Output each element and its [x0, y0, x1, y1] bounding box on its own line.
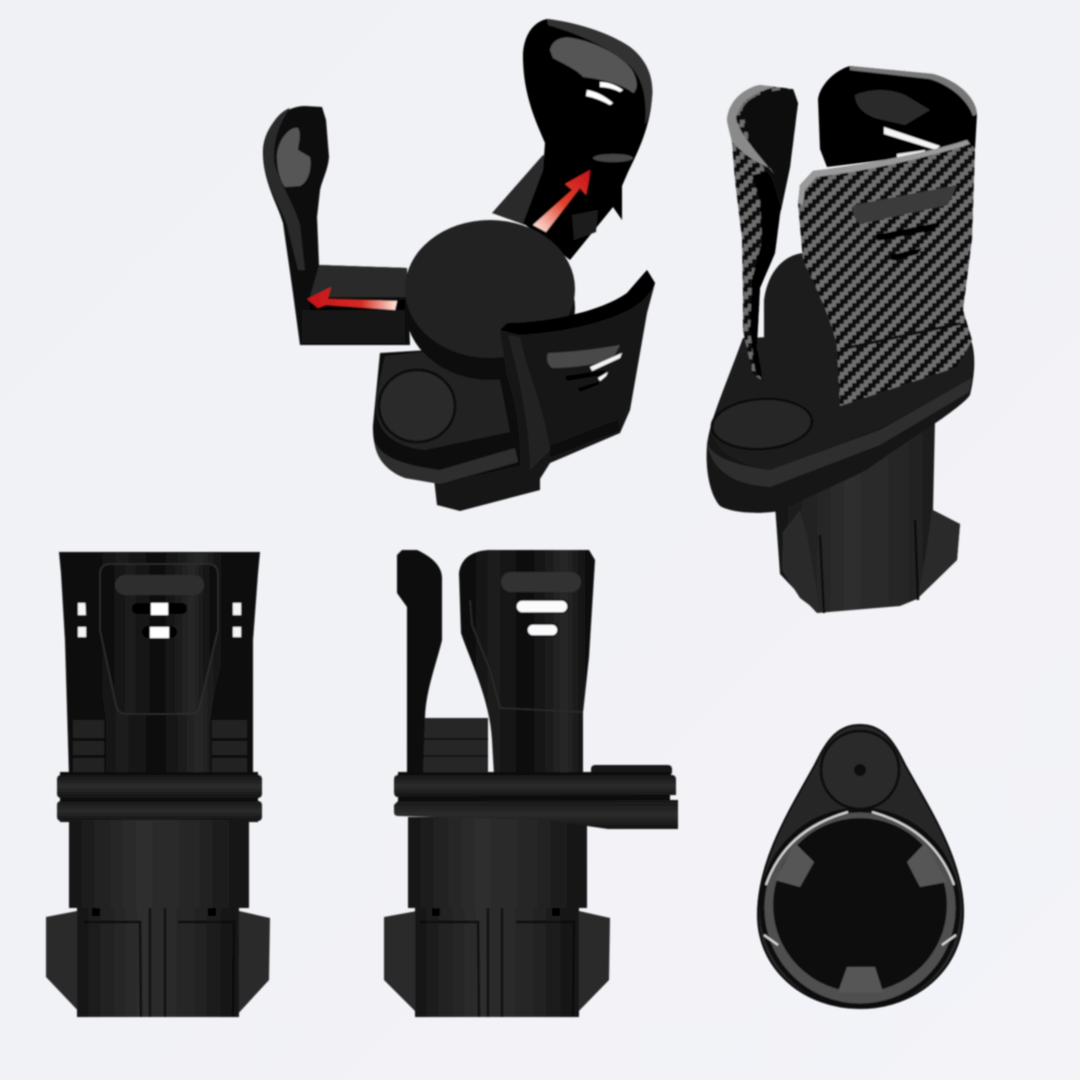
slim clip — [397, 550, 442, 775]
plate button — [591, 765, 672, 776]
right arm — [523, 19, 652, 260]
stem with wings — [775, 420, 960, 613]
central disc — [405, 220, 575, 380]
side stacked blocks — [73, 720, 247, 772]
collar — [57, 772, 262, 822]
view: front elevation — [46, 552, 270, 1017]
dome — [764, 253, 842, 395]
central clip body — [84, 553, 232, 772]
rear cup interior — [818, 66, 977, 167]
view: open holder with red arrows — [263, 19, 655, 511]
outer ring — [762, 810, 958, 1006]
red arrow left — [307, 287, 397, 310]
cylinder — [69, 820, 249, 908]
outer clips — [59, 552, 260, 775]
ring highlights — [764, 812, 956, 945]
cylinder — [408, 817, 587, 908]
grey wedges — [775, 843, 947, 992]
front cup arm — [500, 270, 655, 490]
foot with wings — [46, 908, 270, 1017]
side window gaps — [78, 603, 241, 637]
foot with wings — [384, 908, 610, 1017]
stem — [433, 440, 540, 511]
view: carbon fibre holder — [707, 66, 977, 613]
diagonal strut — [492, 155, 572, 225]
left arm — [263, 106, 410, 345]
view: top-down teardrop — [758, 725, 963, 1008]
side blocks — [423, 718, 488, 774]
wide clip — [459, 550, 595, 775]
front carbon panel — [798, 140, 975, 406]
view: side elevation — [384, 550, 678, 1017]
dial — [821, 731, 899, 809]
base plate — [373, 340, 625, 484]
oval base — [707, 331, 974, 513]
left carbon arm — [727, 85, 798, 381]
red arrow right — [533, 170, 590, 232]
swivel plates — [394, 772, 678, 829]
teardrop body — [758, 725, 963, 1008]
inner black disc — [773, 818, 947, 992]
